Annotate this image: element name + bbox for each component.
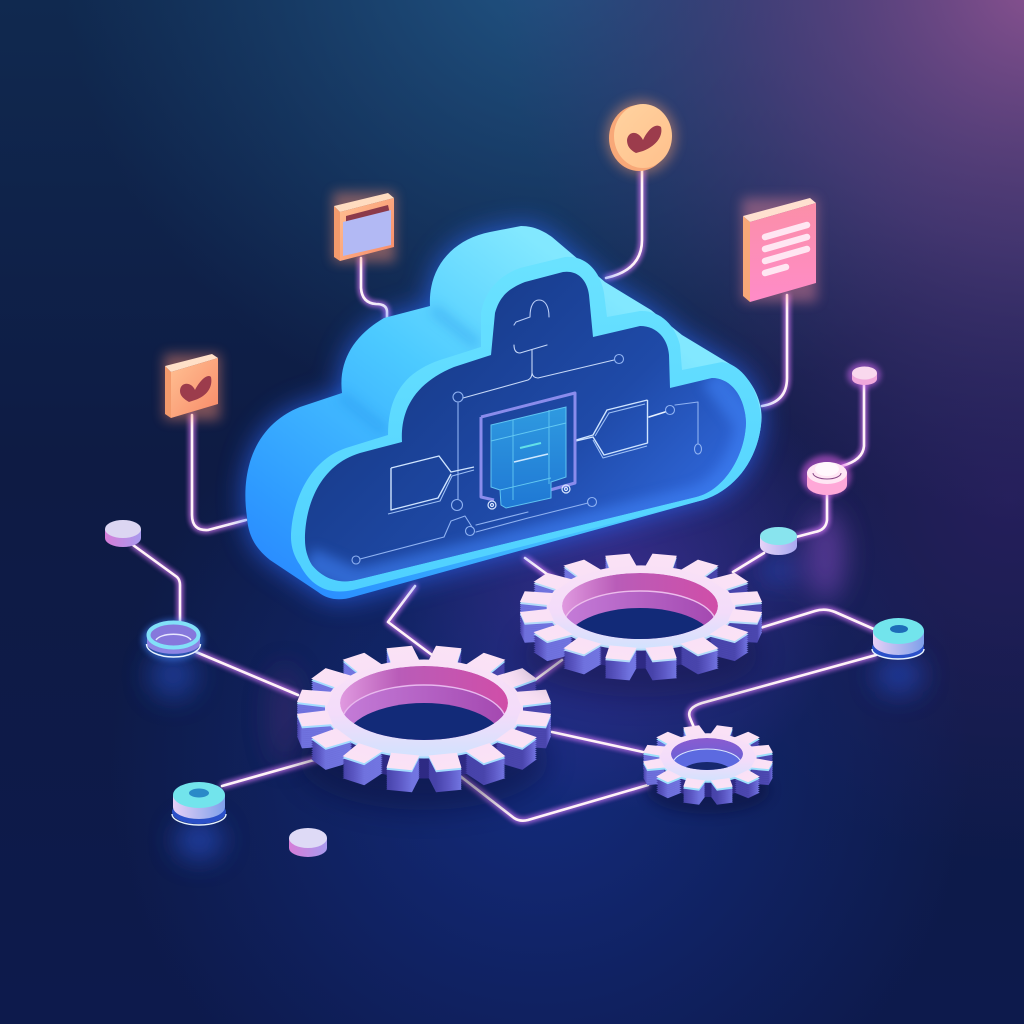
gear top edge highlight xyxy=(520,555,762,663)
gear shadow xyxy=(299,710,549,810)
gear hole xyxy=(562,573,718,639)
gear top face xyxy=(643,725,773,789)
cloud glow xyxy=(245,226,762,599)
node: small pink disc xyxy=(847,362,881,388)
gear top face xyxy=(297,646,551,770)
gear: large right xyxy=(520,553,762,697)
icon: left heart-check tile xyxy=(164,354,220,420)
gear hub wall xyxy=(547,607,735,669)
icon: folder tile xyxy=(333,192,395,262)
gear hole xyxy=(671,738,743,770)
icon: check circle xyxy=(606,100,676,174)
gear top face xyxy=(520,553,762,661)
tree connector xyxy=(463,345,614,398)
gear: small xyxy=(643,725,773,814)
central chip frame xyxy=(481,393,575,500)
panel inner glow xyxy=(308,376,748,582)
gear hole xyxy=(340,666,508,740)
gear teeth extrusion xyxy=(520,557,762,681)
cloud inner panel xyxy=(305,272,746,581)
node: lavender disc left xyxy=(105,520,141,547)
cloud front rim xyxy=(291,257,761,592)
person cloud outline xyxy=(514,300,549,325)
gear: large left xyxy=(297,646,551,810)
gear shadow xyxy=(646,766,770,814)
gear hub wall xyxy=(325,708,523,778)
node: teal ring bottom left xyxy=(172,782,226,825)
document glow xyxy=(742,198,817,302)
thin traces xyxy=(360,402,698,559)
circuit diagram xyxy=(352,300,702,564)
node: teal ring right xyxy=(872,618,924,659)
left bracket box xyxy=(388,456,474,514)
tile glow xyxy=(333,192,395,262)
icon: document tile xyxy=(742,198,817,302)
node: pink button xyxy=(801,455,851,497)
cloud xyxy=(245,226,762,599)
node: disc upper right xyxy=(760,527,797,555)
connector lines xyxy=(133,170,876,821)
right bracket box xyxy=(576,400,648,458)
tile glow xyxy=(164,354,220,420)
cloud side creases xyxy=(340,308,478,432)
node: pink disc bottom xyxy=(289,828,327,857)
gear teeth extrusion xyxy=(297,650,551,792)
circle glow xyxy=(606,100,676,174)
gear hub wall xyxy=(659,757,757,797)
floor reflections xyxy=(149,510,923,860)
gear shadow xyxy=(523,613,759,697)
circuit nodes xyxy=(352,354,702,564)
gear top edge highlight xyxy=(643,727,773,791)
gear top edge highlight xyxy=(297,648,551,772)
gear teeth extrusion xyxy=(643,729,773,805)
chip screws xyxy=(488,485,570,509)
cloud extruded side xyxy=(245,226,762,599)
node: blue ring left xyxy=(142,619,204,661)
central chip xyxy=(491,407,566,508)
